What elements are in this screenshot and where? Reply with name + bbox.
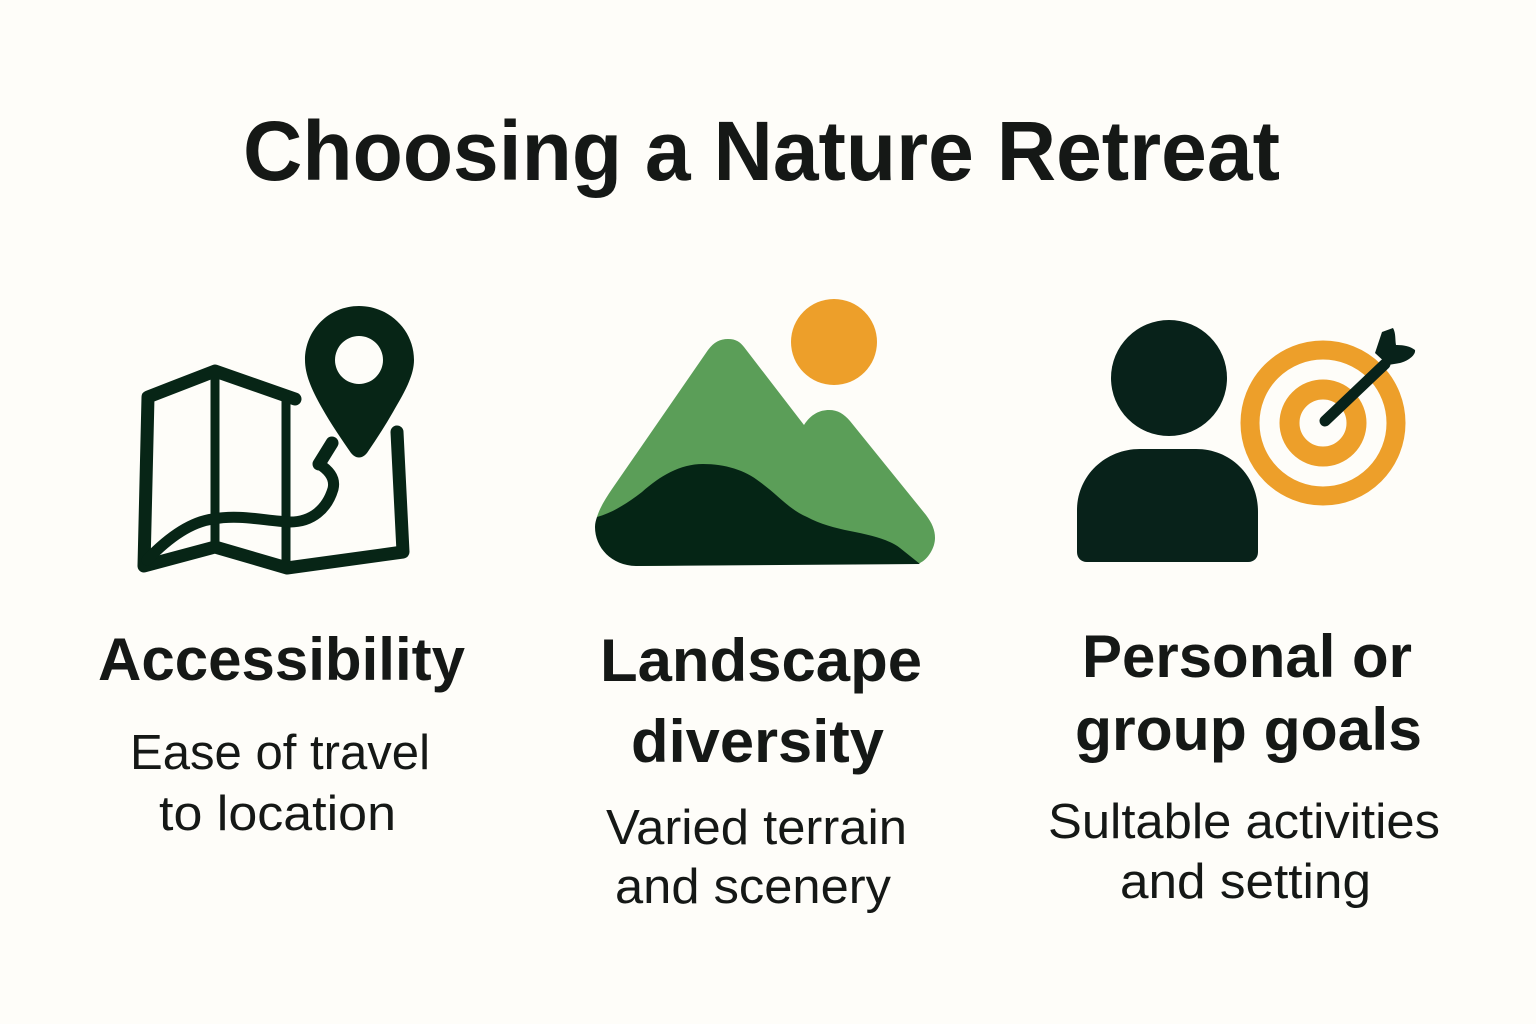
icon: folded map with location pin [144, 306, 414, 568]
description: personal or group goals: Sultable activities [1048, 795, 1440, 849]
icon: mountains and sun [595, 299, 935, 566]
target rings [1250, 350, 1396, 496]
description: accessibility: Ease of travel [130, 726, 430, 780]
description: landscape diversity: and scenery [615, 860, 892, 914]
route line [147, 464, 334, 560]
description: landscape diversity: Varied terrain [606, 801, 907, 855]
panel: landscape diversity [595, 299, 935, 914]
heading: landscape diversity: Landscape [600, 627, 922, 694]
sun [791, 299, 877, 385]
person body [1077, 449, 1258, 562]
dark foreground hill [595, 464, 920, 566]
description: accessibility: to location [159, 787, 396, 841]
heading: accessibility: Accessibility [98, 626, 466, 693]
person head [1111, 320, 1227, 436]
map fold lines [215, 371, 286, 568]
heading: landscape diversity: diversity [631, 708, 885, 775]
map outline [144, 371, 403, 568]
description: personal or group goals: and setting [1120, 855, 1371, 909]
heading: personal or group goals: Personal or [1082, 623, 1412, 690]
route tip [319, 443, 332, 464]
location pin [305, 306, 414, 458]
arrow [1325, 328, 1415, 421]
panel: personal or group goals [1048, 320, 1440, 909]
heading: personal or group goals: group goals [1075, 696, 1422, 763]
green mountains [597, 339, 935, 566]
title: Choosing a Nature Retreat [243, 104, 1280, 198]
icon: person with target [1077, 320, 1415, 562]
panel: accessibility [98, 306, 466, 841]
